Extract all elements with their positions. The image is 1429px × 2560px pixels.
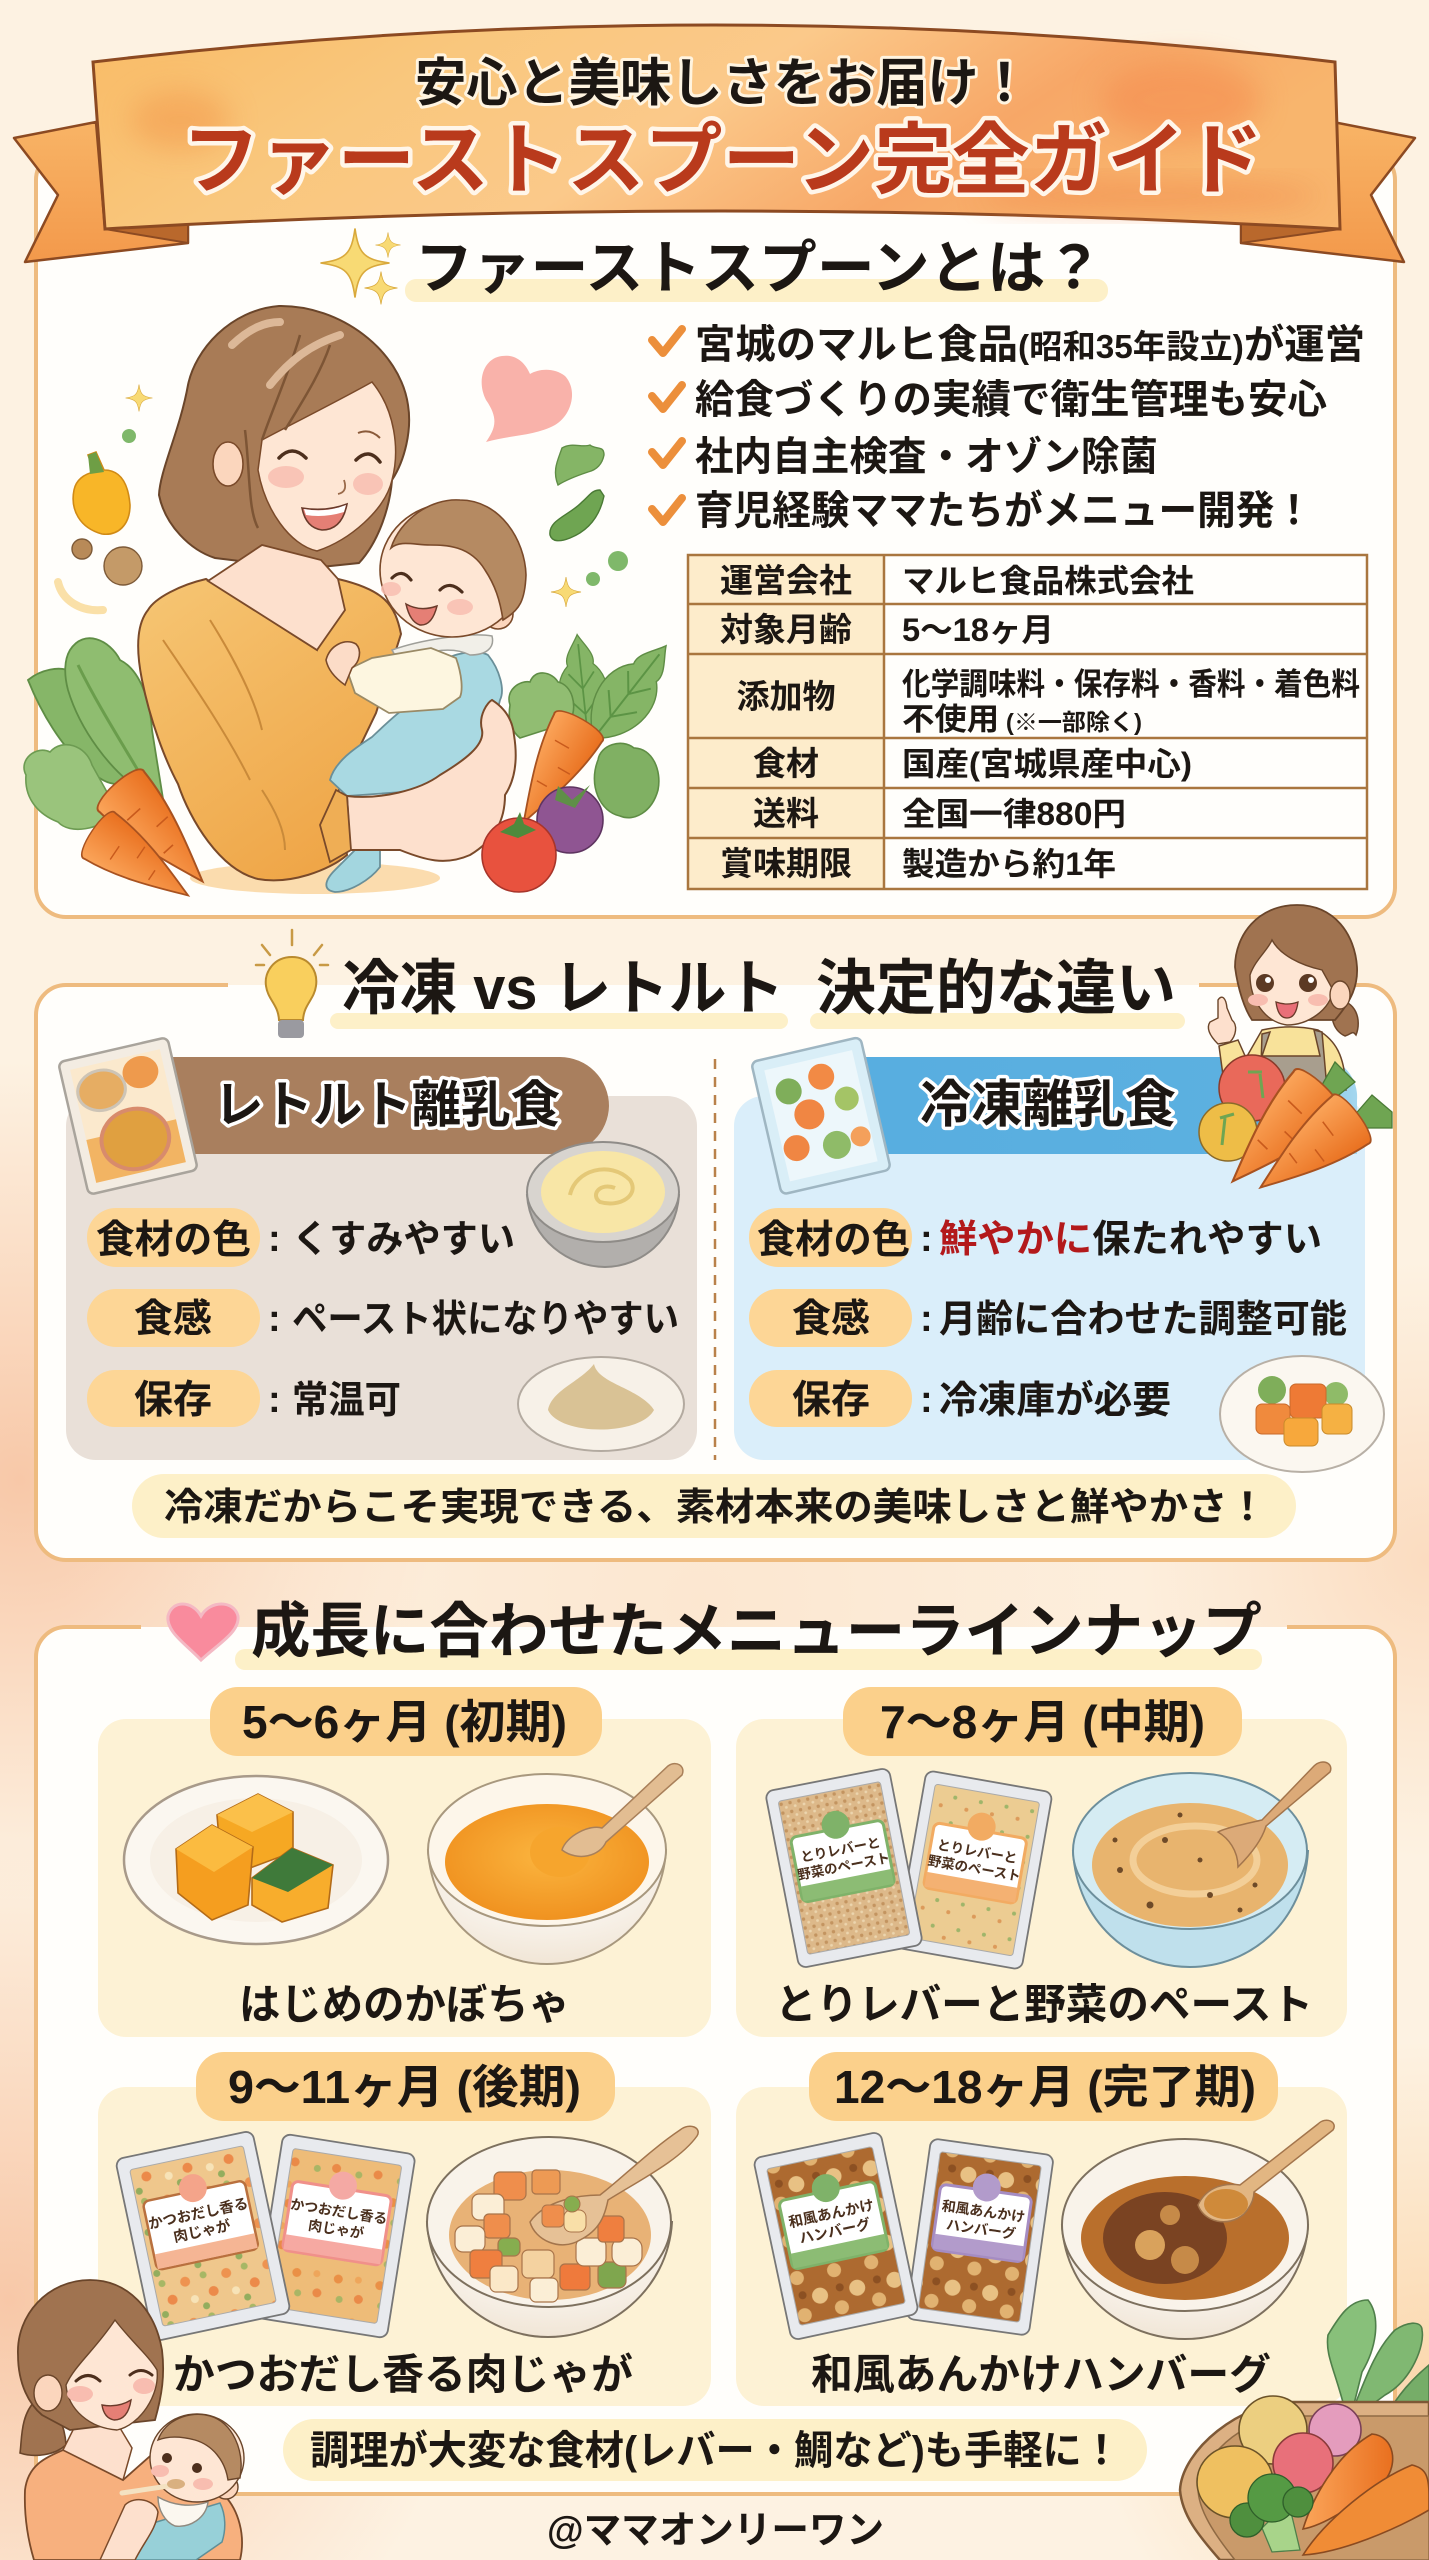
menu name: 和風あんかけハンバーグ (811, 2351, 1271, 2398)
divider (714, 1059, 716, 1460)
icon: hamburg pack green: ハンバーグ (798, 2215, 873, 2247)
icon: hamburg pack green (753, 2132, 919, 2340)
checklist (652, 323, 1365, 533)
panel: menu lineup (36, 1598, 1395, 2494)
heading: comparison (342, 955, 1176, 1022)
sweater (138, 579, 401, 880)
icon: light bulb (256, 930, 328, 1038)
icon: pumpkin plate (124, 1776, 388, 1944)
face (1250, 940, 1333, 1025)
heading: comparison: 冷凍 vs レトルト (342, 955, 784, 1022)
icon: nikujaga pack peach: かつおだし香る (147, 2194, 250, 2233)
icon: liver paste pack green: とりレバーと (799, 1835, 882, 1865)
icon: nikujaga pack rose: かつおだし香る (289, 2196, 389, 2227)
greens (1327, 2300, 1429, 2445)
icon: hamburg pack purple: ハンバーグ (945, 2216, 1017, 2242)
pills: frozen: 食感 (792, 1298, 870, 1341)
pointing hand (1208, 997, 1236, 1044)
pepper (73, 452, 130, 534)
table: company facts: 添加物 (736, 678, 836, 715)
cuff (320, 790, 351, 862)
card: frozen baby food: 冷凍離乳食 (920, 1076, 1176, 1133)
broccoli (1230, 2474, 1313, 2552)
menu name: かつおだし香る肉じゃが (173, 2351, 633, 2398)
table: company facts: 運営会社 (720, 562, 852, 599)
carrot right (500, 706, 607, 836)
icon: hamburg pack purple: 和風あんかけ (941, 2197, 1026, 2225)
face (258, 382, 396, 551)
icon: hamburg bowl (1062, 2120, 1334, 2339)
tagline: 安心と美味しさをお届け！ (415, 55, 1030, 113)
values: retort: : (268, 1298, 281, 1340)
bullet text (695, 323, 1365, 533)
icon: hamburg pack purple (906, 2138, 1054, 2336)
carrots left (92, 764, 225, 902)
values: retort: : (268, 1218, 281, 1260)
hair (1235, 905, 1357, 1020)
heading: what is First Spoon: ファーストスプーンとは？ (415, 236, 1103, 301)
hair (159, 306, 409, 567)
callout: easy cooking: 調理が大変な食材(レバー・鯛など)も手軽に！ (310, 2429, 1121, 2473)
illustration: mother feeding baby (18, 2280, 244, 2560)
header: retort (173, 1057, 609, 1154)
fruits (1239, 2396, 1307, 2464)
card: 7-8 months (736, 1687, 1347, 2037)
baby hand (326, 642, 359, 685)
pills: frozen: 保存 (792, 1379, 870, 1422)
icon: frozen pack (751, 1037, 891, 1195)
card: 12-18 months (736, 2052, 1347, 2406)
neck and chest (208, 545, 345, 650)
icon: liver paste pack green (765, 1768, 923, 1968)
mother's arm (347, 700, 516, 861)
top (25, 2450, 242, 2560)
table: company facts: 食材 (753, 745, 819, 782)
right greens (509, 629, 688, 818)
callout: frozen advantage (132, 1474, 1296, 1538)
baby romper (330, 652, 502, 796)
face (66, 2320, 157, 2430)
table: company facts: 送料 (753, 795, 819, 832)
baby head (214, 2475, 238, 2499)
icon: cream bowl (527, 1142, 679, 1267)
age pill (210, 1687, 602, 1756)
pills: retort: 食感 (134, 1298, 212, 1341)
carrots in basket (1303, 2434, 1393, 2529)
ponytail (1332, 1000, 1358, 1036)
bullet text: 給食づくりの実績で衛生管理も安心 (695, 378, 1327, 422)
values: frozen: 月齢に合わせた調整可能 (939, 1299, 1347, 1341)
baby head (483, 599, 513, 629)
callout: frozen advantage: 冷凍だからこそ実現できる、素材本来の美味しさと鮮やかさ！ (164, 1487, 1267, 1529)
table: company facts (688, 555, 1367, 889)
icon: liver paste pack green: 野菜のペースト (796, 1850, 891, 1883)
hair strands (245, 335, 330, 528)
pills: retort (87, 1208, 260, 1427)
values: retort: くすみやすい (292, 1219, 515, 1261)
illustration: vegetable basket (1180, 2300, 1429, 2560)
age pill (809, 2052, 1278, 2121)
baby body (133, 2503, 225, 2560)
card: frozen baby food (734, 1037, 1384, 1472)
values: frozen: 冷凍庫が必要 (939, 1380, 1171, 1422)
pale streak (58, 582, 103, 610)
potatoes (72, 539, 92, 559)
values: retort (268, 1218, 679, 1422)
table: company facts: 国産(宮城県産中心) (902, 746, 1192, 782)
table: company facts: 5〜18ヶ月 (902, 612, 1054, 648)
values: frozen: : (920, 1298, 933, 1340)
icon: liver paste pack orange (895, 1770, 1053, 1970)
icon: paste plate (518, 1357, 684, 1451)
left greens (24, 638, 172, 830)
icon: nikujaga pack peach (115, 2130, 291, 2342)
icon: pumpkin puree bowl (428, 1764, 683, 1964)
values: frozen: 鮮やかに保たれやすい (939, 1219, 1322, 1261)
table: company facts: 化学調味料・保存料・香料・着色料 (902, 667, 1360, 702)
values: frozen: : (920, 1218, 933, 1260)
card: 9-11 months: 9〜11ヶ月 (後期) (228, 2061, 581, 2113)
watercolor wash under figure (190, 862, 440, 894)
icon: nikujaga bowl (427, 2126, 698, 2337)
age pill (196, 2052, 615, 2121)
pills: retort: 食材の色 (96, 1219, 251, 1262)
ear (213, 442, 243, 486)
ribbon tails (14, 122, 1415, 262)
icon: nikujaga pack peach: 肉じゃが (172, 2216, 233, 2246)
pills: frozen (749, 1208, 912, 1427)
ponytail (20, 2398, 66, 2455)
ribbon body (93, 25, 1340, 229)
neck (63, 2420, 132, 2480)
leaf and cucumber (555, 445, 604, 485)
icon: liver paste pack orange: とりレバーと (936, 1837, 1018, 1866)
card: 5-6 months: 5〜6ヶ月 (初期) (242, 1696, 567, 1748)
carrot greens (1318, 1062, 1392, 1128)
baby sleeve (347, 648, 462, 713)
table: company facts: 不使用 (※一部除く) (902, 702, 1142, 737)
icon: hamburg pack green: 和風あんかけ (787, 2197, 876, 2231)
main title: ファーストスプーン完全ガイド (182, 116, 1263, 204)
values: retort: : (268, 1379, 281, 1421)
apple (1219, 1055, 1285, 1121)
card: 12-18 months: 12〜18ヶ月 (完了期) (834, 2061, 1256, 2113)
bib (158, 2497, 208, 2526)
heading underline: about (405, 279, 1108, 302)
table: company facts: 対象月齢 (720, 611, 852, 648)
icon: retort pack (58, 1037, 198, 1195)
bullet text: 社内自主検査・オゾン除菌 (695, 435, 1158, 479)
menu name: とりレバーと野菜のペースト (775, 1981, 1313, 2028)
illustration: mother and baby with vegetables (24, 306, 688, 918)
card: 9-11 months (98, 2052, 711, 2406)
values: retort: ペースト状になりやすい (292, 1299, 679, 1341)
carrots (1209, 1064, 1348, 1204)
table: company facts: マルヒ食品株式会社 (902, 563, 1194, 599)
face details (279, 451, 380, 462)
table: company facts: 賞味期限 (720, 845, 852, 882)
tomato (482, 818, 556, 892)
icon: vegetable plate (1220, 1356, 1384, 1472)
values: retort: 常温可 (292, 1380, 401, 1422)
heading underline: comparison (330, 1013, 1185, 1029)
basket (1180, 2402, 1429, 2560)
watercolor blotches (130, 60, 1320, 210)
pills: retort: 保存 (134, 1379, 212, 1422)
hair (18, 2280, 163, 2430)
icon: girl pointing with vegetables (1199, 905, 1392, 1212)
baby collar (392, 635, 493, 664)
heading underline: lineup (235, 1649, 1262, 1670)
heart (482, 356, 572, 442)
shirt (1219, 1027, 1346, 1090)
card: retort baby food: レトルト離乳食 (214, 1077, 560, 1133)
bullet text: 育児経験ママたちがメニュー開発！ (695, 489, 1313, 533)
heading: comparison: 決定的な違い (816, 955, 1176, 1022)
spoon and hand (122, 2485, 175, 2493)
menu name: はじめのかぼちゃ (239, 1981, 570, 2028)
icon: sparkles (320, 228, 401, 304)
card: retort baby food (58, 1037, 697, 1460)
icon: check marks (652, 329, 682, 522)
card: 7-8 months: 7〜8ヶ月 (中期) (880, 1696, 1205, 1748)
age pill (843, 1687, 1242, 1756)
heading: lineup: 成長に合わせたメニューラインナップ (251, 1598, 1262, 1665)
callout: easy cooking (283, 2419, 1147, 2481)
panel: about First Spoon (24, 150, 1395, 918)
card: 5-6 months (98, 1687, 711, 2037)
values: frozen (920, 1218, 1347, 1422)
yellow fruit (1199, 1103, 1257, 1161)
icon: heart (168, 1604, 238, 1660)
footer credit: @ママオンリーワン (547, 2510, 884, 2552)
bullet text: 宮城のマルヒ食品(昭和35年設立)が運営 (695, 323, 1365, 367)
values: frozen: : (920, 1379, 933, 1421)
icon: liver paste bowl (1073, 1762, 1331, 1967)
apron (1260, 1030, 1328, 1100)
pills: frozen: 食材の色 (757, 1219, 910, 1262)
panel: frozen vs retort (36, 905, 1395, 1560)
icon: nikujaga pack rose: 肉じゃが (307, 2217, 365, 2241)
peas (122, 429, 628, 586)
table: company facts: 全国一律880円 (902, 796, 1126, 832)
icon: nikujaga pack rose (254, 2134, 416, 2338)
table: company facts: 製造から約1年 (902, 846, 1116, 882)
header: frozen (866, 1057, 1357, 1154)
banner ribbon (14, 25, 1415, 262)
icon: liver paste pack orange: 野菜のペースト (927, 1853, 1022, 1884)
beet (537, 787, 603, 853)
